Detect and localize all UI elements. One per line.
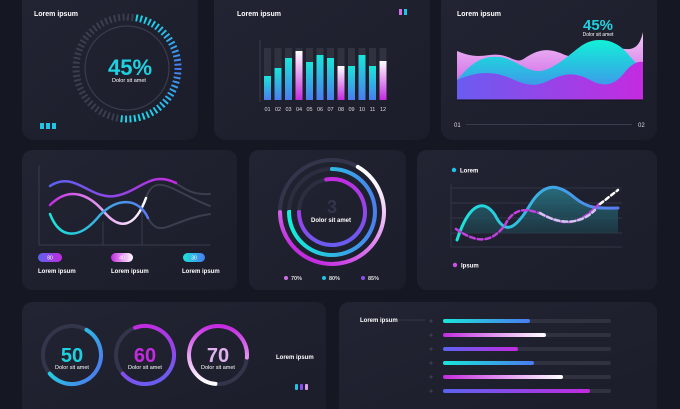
caption: Dolor sit amet [112, 78, 146, 84]
x labels: 04 [296, 107, 302, 113]
panel: area chart [441, 0, 657, 140]
bars [260, 40, 386, 102]
gauge ring [76, 17, 178, 119]
grid [451, 184, 622, 247]
legend: Ipsum [453, 263, 479, 270]
value: 45%: 45% [583, 17, 613, 34]
x labels: 01 [264, 107, 271, 113]
x labels: 09 [348, 107, 355, 113]
legend: Ipsum: Ipsum [461, 264, 479, 270]
value: 3 [327, 197, 337, 217]
area chart [457, 32, 643, 100]
heading: gauge: Lorem ipsum [34, 11, 78, 18]
panel: bar chart [214, 0, 430, 140]
pills: 40 [119, 256, 125, 262]
rings [261, 141, 403, 283]
ring 70: 70 [207, 345, 229, 367]
panel: wave line chart [417, 150, 657, 290]
legend: Lorem: Lorem [460, 168, 478, 174]
legend icons [399, 9, 407, 15]
labels: Lorem ipsum [38, 269, 76, 275]
legend: 70% [291, 276, 302, 282]
labels [38, 269, 220, 275]
x labels: 02 [275, 107, 281, 113]
panel: score rings [22, 302, 326, 409]
panel: line chart [22, 150, 237, 290]
range labels: 02 [638, 123, 645, 129]
legend: Lorem [452, 168, 478, 174]
x labels [264, 107, 386, 113]
chart [456, 187, 618, 240]
x labels: 10 [359, 107, 365, 113]
pills [38, 253, 205, 262]
x labels: 07 [327, 107, 334, 113]
ring 60 [108, 318, 182, 392]
ring 70 [187, 324, 249, 386]
x labels: 11 [370, 107, 375, 113]
panel: radial gauge [22, 0, 198, 140]
heading: Lorem ipsum [457, 11, 501, 18]
ring 50 [32, 315, 112, 395]
chart [39, 166, 210, 245]
icon: dots [295, 384, 308, 390]
label: Lorem ipsum [276, 355, 314, 361]
range labels: 01 [454, 123, 461, 129]
legend: 85% [368, 276, 379, 282]
ring 50: Dolor sit amet [55, 365, 89, 371]
panel: concentric rings [249, 141, 406, 290]
caption: Dolor sit amet [583, 32, 614, 38]
pills: 80 [47, 256, 53, 262]
pills: 30 [191, 256, 197, 262]
x labels: 12 [380, 107, 386, 113]
legend: 80% [329, 276, 340, 282]
x labels: 05 [306, 107, 313, 113]
heading: Lorem ipsum [237, 11, 281, 18]
x labels: 08 [338, 107, 344, 113]
value: 45%: 45% [108, 55, 152, 80]
ring 60: Dolor sit amet [128, 365, 162, 371]
ring 50: 50 [61, 345, 83, 367]
labels: Lorem ipsum [111, 269, 149, 275]
caption: Dolor sit amet [311, 218, 351, 224]
x labels: 03 [285, 107, 292, 113]
ring 70: Dolor sit amet [201, 365, 235, 371]
bars [430, 319, 611, 393]
range labels [454, 123, 645, 129]
heading: Lorem ipsum [360, 318, 398, 324]
ring 60: 60 [134, 345, 156, 367]
icon: squares [40, 123, 56, 129]
panel: progress bars [339, 302, 657, 409]
labels: Lorem ipsum [182, 269, 220, 275]
x labels: 06 [317, 107, 323, 113]
legend [284, 276, 379, 282]
